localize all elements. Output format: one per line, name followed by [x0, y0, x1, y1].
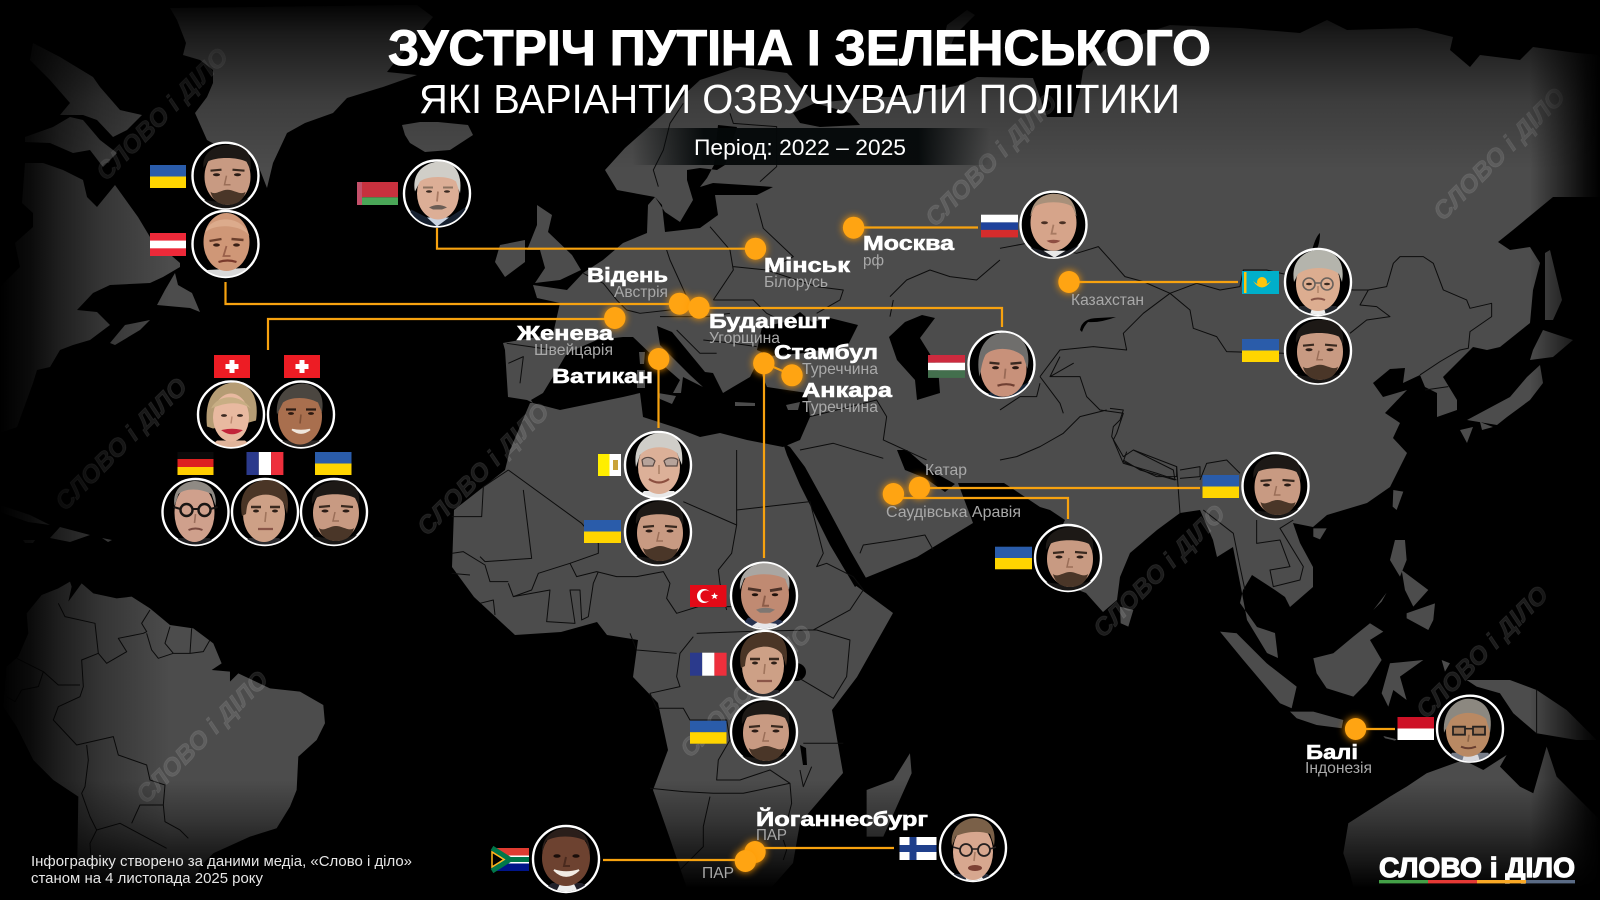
- seas cut out of land: [531, 103, 1320, 765]
- flag: Austria: [150, 233, 186, 256]
- flag: Turkey: [690, 585, 726, 607]
- logo: СЛОВО і ДІЛО: [1379, 852, 1575, 883]
- watermarks: СЛОВО і ДІЛО: [675, 619, 819, 763]
- Newfoundland: [157, 273, 200, 312]
- city labels: Туреччина: [802, 399, 878, 416]
- city labels: Балі: [1306, 741, 1358, 764]
- Lake Malawi: [800, 745, 807, 765]
- Persian Gulf: [897, 450, 955, 492]
- flag: Switzerland: [284, 355, 320, 378]
- flag: Ukraine: [315, 452, 352, 475]
- Novaya Zemlya: [940, 10, 975, 60]
- Black Sea: [757, 312, 858, 356]
- city labels: Білорусь: [764, 274, 828, 291]
- portrait: Ramaphosa: [533, 826, 599, 892]
- connector lines: [226, 228, 1395, 860]
- location markers: [604, 217, 1366, 872]
- city labels: Відень: [587, 264, 668, 287]
- portrait: Zelensky: [192, 143, 258, 209]
- Sicily, Sardinia, Corsica, Crete, Cyprus: [637, 352, 800, 410]
- city labels: рф: [863, 252, 884, 270]
- flag: Switzerland: [214, 355, 250, 378]
- period band: [632, 128, 990, 165]
- Greenland: [170, 5, 433, 188]
- flag: France: [690, 653, 727, 676]
- Lake Victoria: [786, 663, 806, 681]
- watermarks: СЛОВО і ДІЛО: [1088, 499, 1232, 643]
- Lake Balkhash: [1312, 233, 1320, 254]
- portrait: Cassis: [268, 382, 334, 448]
- portrait: Putin: [1020, 192, 1086, 258]
- flag: Indonesia: [1398, 717, 1434, 740]
- portrait: Zelensky: [1035, 525, 1101, 591]
- portrait: Erdogan: [731, 563, 797, 629]
- land: Afro-Eurasia: [452, 20, 1600, 897]
- watermarks: СЛОВО і ДІЛО: [920, 88, 1064, 232]
- Nova Scotia: [110, 320, 150, 345]
- portrait: Indonesia minister: [1437, 696, 1503, 762]
- watermarks: СЛОВО і ДІЛО: [50, 372, 194, 516]
- period band: Період: 2022 – 2025: [694, 135, 906, 160]
- city labels: Швейцарія: [534, 342, 613, 359]
- source note: станом на 4 листопада 2025 року: [31, 871, 264, 887]
- city labels: Австрія: [614, 284, 668, 301]
- South America: [3, 582, 325, 900]
- flag: Ukraine: [690, 721, 726, 744]
- watermarks: СЛОВО і ДІЛО: [91, 42, 235, 186]
- flag: France: [246, 452, 283, 475]
- flag: Ukraine: [1202, 475, 1239, 498]
- Madagascar: [867, 753, 912, 837]
- Baltic Sea: [655, 125, 773, 232]
- watermarks: СЛОВО і ДІЛО: [1428, 82, 1572, 226]
- city labels: Туреччина: [802, 361, 878, 378]
- portrait: Zelensky: [625, 499, 691, 565]
- portrait: Lukashenko: [404, 160, 470, 226]
- portrait: Keller-Sutter: [198, 382, 264, 448]
- city labels: Катар: [925, 462, 967, 479]
- flag: Vatican: [598, 454, 621, 476]
- source note: [31, 854, 412, 887]
- subtitle: ЯКІ ВАРІАНТИ ОЗВУЧУВАЛИ ПОЛІТИКИ: [419, 76, 1180, 122]
- Ireland: [495, 240, 525, 277]
- city labels: Женева: [516, 322, 614, 345]
- flag: Finland: [900, 837, 936, 860]
- city labels: Мінськ: [764, 254, 851, 277]
- watermarks: СЛОВО і ДІЛО: [131, 665, 275, 809]
- Asian islands: [1120, 490, 1600, 900]
- flag: Kazakhstan: [1242, 271, 1279, 294]
- flag: Russia: [981, 215, 1018, 237]
- portrait: Zelensky: [1242, 453, 1308, 519]
- portrait: Zelensky: [301, 479, 367, 545]
- city labels: [516, 232, 1372, 882]
- source note: Інфографіку створено за даними медіа, «Слово і діло»: [31, 854, 412, 870]
- city labels: Анкара: [802, 379, 893, 402]
- Britain: [527, 205, 581, 283]
- flag: Ukraine: [584, 520, 621, 543]
- portrait: Merz: [162, 479, 228, 545]
- flag: Germany: [178, 452, 214, 475]
- city labels: Будапешт: [709, 310, 830, 333]
- Canadian Arctic: [25, 43, 142, 167]
- flag: Belarus: [357, 182, 398, 205]
- portrait: Zelensky: [1285, 318, 1351, 384]
- portrait: Parolin: [625, 432, 691, 498]
- city labels: Ватикан: [552, 365, 653, 388]
- portrait: Macron: [731, 631, 797, 697]
- city labels: Казахстан: [1071, 292, 1144, 309]
- city labels: Індонезія: [1305, 760, 1372, 777]
- portrait: Zelensky: [731, 699, 797, 765]
- portrait: Orban: [968, 332, 1034, 398]
- flag: Ukraine: [995, 547, 1032, 569]
- flag: Ukraine: [1242, 339, 1279, 362]
- White Sea: [793, 103, 860, 127]
- title: ЗУСТРІЧ ПУТІНА І ЗЕЛЕНСЬКОГО: [388, 20, 1211, 76]
- city labels: Москва: [863, 232, 955, 255]
- Cuba and Antilles: [0, 505, 112, 543]
- Aral Sea: [1080, 317, 1116, 332]
- portrait: Stubb: [940, 815, 1006, 881]
- watermarks: СЛОВО і ДІЛО: [1411, 580, 1555, 724]
- Iceland: [402, 122, 473, 152]
- Japan and Sakhalin: [1460, 250, 1573, 443]
- portrait: Tokayev: [1285, 249, 1351, 315]
- Mediterranean: [531, 326, 810, 447]
- city labels: Йоганнесбург: [756, 807, 928, 831]
- Canada and eastern USA: [0, 163, 180, 433]
- Red Sea: [783, 443, 866, 587]
- watermarks: СЛОВО і ДІЛО: [412, 397, 556, 541]
- city labels: Саудівська Аравія: [886, 504, 1021, 521]
- city labels: Угорщина: [709, 330, 780, 347]
- flag: Hungary: [928, 355, 965, 378]
- portrait: Macron: [232, 479, 298, 545]
- flag: South Africa: [492, 848, 529, 871]
- portrait: Austria minister: [192, 211, 258, 277]
- city labels: ПАР: [702, 865, 734, 882]
- city labels: Стамбул: [774, 341, 878, 364]
- Caspian Sea: [889, 315, 940, 400]
- flag: Ukraine: [150, 165, 186, 188]
- city labels: ПАР: [756, 827, 787, 844]
